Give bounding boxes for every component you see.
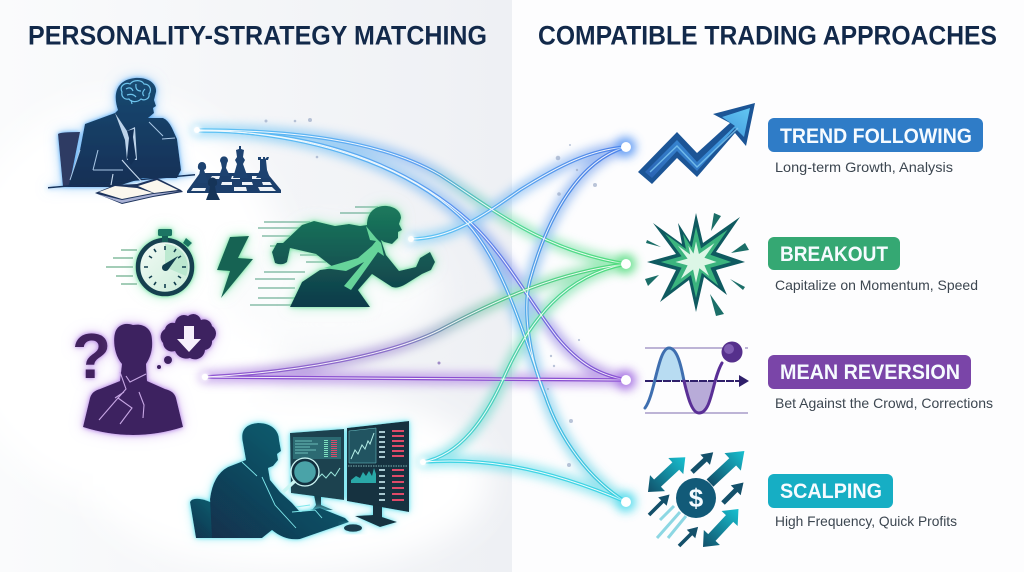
icon: trend arrow — [638, 103, 755, 184]
label: breakout: Capitalize on Momentum, Speed — [775, 277, 978, 293]
trader silhouette — [190, 423, 349, 539]
floating particles — [264, 118, 597, 467]
chess board and pieces — [187, 146, 281, 200]
monitors — [290, 421, 409, 527]
label: scalping: SCALPING — [780, 480, 882, 503]
label: mean reversion — [768, 355, 993, 411]
glow layer for lines — [197, 130, 626, 502]
magnifying glass — [283, 458, 319, 492]
icon: lightning bolt — [217, 236, 253, 298]
label: mean reversion: Bet Against the Crowd, Corrections — [775, 395, 993, 411]
source node dots — [193, 126, 427, 466]
trader arm highlights — [242, 462, 322, 528]
investor silhouette — [83, 314, 216, 435]
burst shards — [645, 213, 749, 316]
coloured line strokes — [197, 130, 626, 502]
icon: stopwatch with speed lines — [106, 229, 192, 294]
icon: scalping arrows and dollar: $ — [689, 483, 704, 513]
analyst silhouette — [48, 78, 195, 188]
stopwatch ticks — [144, 246, 186, 288]
white line cores — [197, 130, 626, 502]
runner shirt and tie — [324, 226, 384, 290]
label: scalping — [768, 474, 957, 529]
icon: breakout burst — [645, 213, 749, 316]
mouse — [344, 524, 362, 532]
investor hand and shirt outline — [99, 372, 146, 424]
label: mean reversion: MEAN REVERSION — [780, 361, 960, 384]
question mark: ? — [72, 320, 111, 392]
label: trend following — [768, 118, 983, 175]
icon: analyst at desk with brain and chess — [48, 78, 281, 204]
target node dots — [616, 137, 636, 512]
icon: scalping arrows and dollar — [640, 442, 753, 555]
connection lines — [197, 130, 626, 502]
label: breakout: BREAKOUT — [780, 243, 888, 266]
dark arrows — [645, 447, 748, 550]
icon: trader at monitors — [190, 421, 409, 539]
ball — [722, 342, 742, 362]
teal arrows — [640, 442, 753, 555]
speed lines — [106, 250, 137, 284]
runner speed lines — [250, 207, 378, 305]
right monitor charts — [348, 428, 408, 483]
icon: doubtful investor — [72, 314, 216, 435]
writing hand — [111, 160, 143, 185]
shirt and tie — [115, 113, 137, 160]
brain — [121, 81, 150, 104]
right monitor tables — [379, 431, 404, 500]
icon: mean reversion wave — [645, 342, 749, 413]
label: trend following: TREND FOLLOWING — [780, 125, 972, 148]
cloud down arrow — [177, 326, 201, 352]
stopwatch wedge — [165, 244, 188, 276]
left heading: PERSONALITY-STRATEGY MATCHING — [28, 20, 487, 50]
dollar coin — [676, 478, 716, 518]
runner silhouette — [272, 206, 435, 307]
label: scalping: High Frequency, Quick Profits — [775, 513, 957, 529]
speed streaks — [657, 506, 686, 538]
label: trend following: Long-term Growth, Analysis — [775, 159, 953, 175]
label: breakout — [768, 237, 978, 293]
icon: running trader — [250, 206, 435, 307]
left monitor content — [293, 437, 341, 480]
stopwatch hand — [162, 256, 178, 271]
open book — [95, 178, 183, 204]
